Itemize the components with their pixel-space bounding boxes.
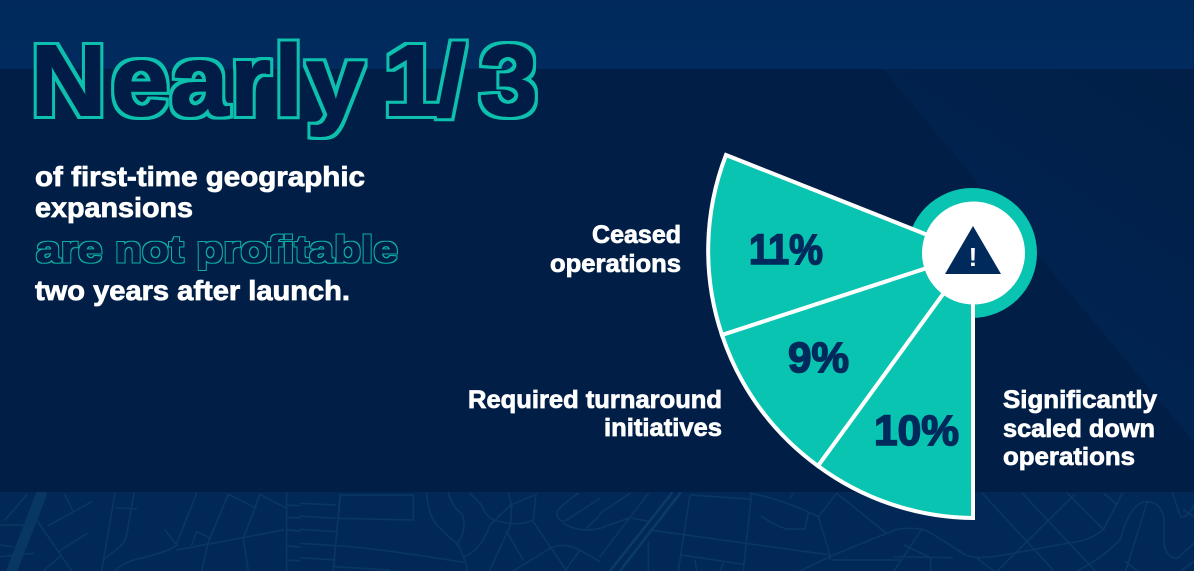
text line: two years after launch.: two years after launch. bbox=[35, 275, 350, 306]
value: 11%: 11% bbox=[749, 226, 823, 274]
label: Significantly scaled down operations: Significantly bbox=[1003, 386, 1157, 414]
text line: are not profitable (outlined): are not profitable bbox=[36, 229, 398, 270]
text line: of first-time geographic: of first-time geographic bbox=[35, 161, 365, 192]
segment: 11% ceased operations bbox=[708, 155, 973, 335]
hub circle bbox=[922, 202, 1025, 304]
chart: fan-shaped pie with warning hub bbox=[708, 155, 1037, 518]
label: Significantly scaled down operations bbox=[1003, 386, 1157, 471]
value: 9%: 9% bbox=[788, 334, 849, 382]
label: Ceased operations: Ceased bbox=[592, 221, 681, 249]
text block: description bbox=[35, 161, 398, 306]
background: diagonal lighter wedge bbox=[883, 69, 1194, 442]
label: Required turnaround initiatives bbox=[468, 386, 722, 442]
segment: 9% required turnaround initiatives bbox=[722, 253, 973, 466]
value: 10%: 10% bbox=[874, 407, 959, 455]
background: top band bbox=[0, 0, 1194, 69]
text line: expansions: expansions bbox=[35, 192, 193, 223]
label: Significantly scaled down operations: scaled down bbox=[1003, 415, 1155, 443]
background: bottom street map band bbox=[0, 492, 1194, 571]
label: Significantly scaled down operations: operations bbox=[1003, 443, 1135, 471]
icon: warning triangle bbox=[945, 226, 1001, 274]
title: Nearly 1/3: Nearly 1/3 bbox=[31, 24, 538, 136]
segment: 10% significantly scaled down operations bbox=[818, 253, 973, 518]
label: Required turnaround initiatives: Required turnaround bbox=[468, 386, 722, 414]
icon: warning triangle: ! bbox=[969, 242, 977, 272]
label: Ceased operations bbox=[550, 221, 681, 278]
hub ring bbox=[907, 188, 1037, 318]
label: Ceased operations: operations bbox=[550, 250, 681, 278]
label: Required turnaround initiatives: initiatives bbox=[604, 414, 722, 442]
